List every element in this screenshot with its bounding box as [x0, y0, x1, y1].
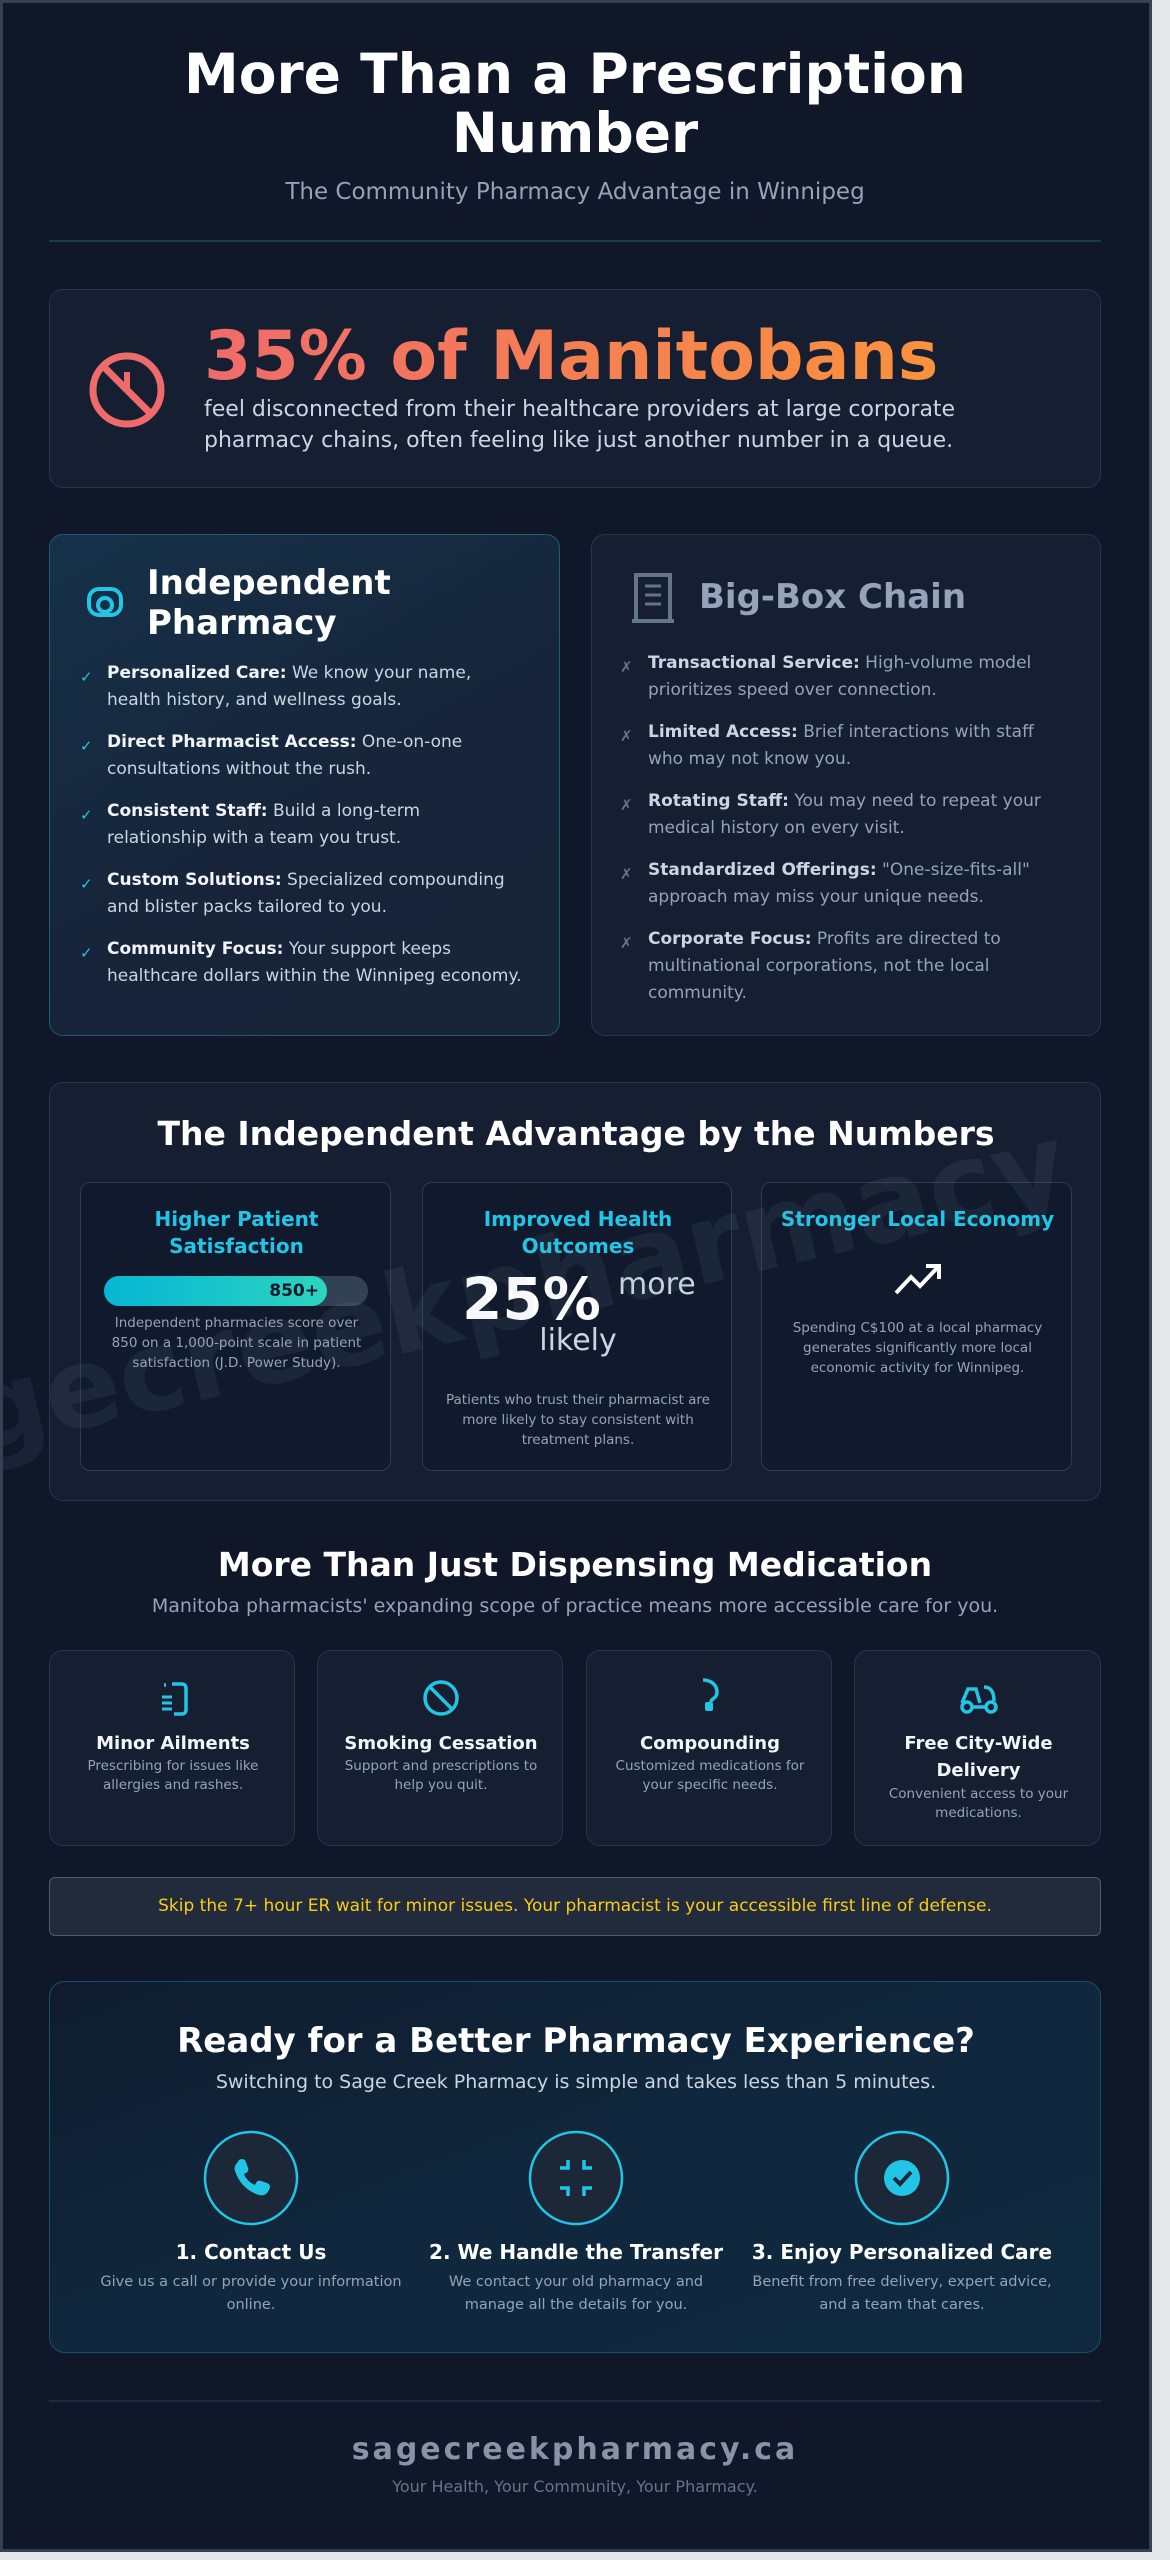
list: independent benefits: ✓: [80, 944, 93, 962]
list: big-box drawbacks: ✗: [620, 796, 633, 814]
heading: independent: Pharmacy: [147, 603, 337, 643]
stat card: health outcomes: more: [618, 1267, 696, 1302]
list: big-box drawbacks: ✗: [620, 658, 633, 676]
footer: tagline: Your Health, Your Community, Your Pharmacy.: [392, 2477, 758, 2496]
service card: compounding: Compounding: [640, 1733, 780, 1754]
list: independent benefits: Consistent Staff: Build a long-term relationship with a team you trust.: [107, 801, 420, 848]
list: independent benefits: ✓: [80, 875, 93, 893]
list: independent benefits: Personalized Care: We know your name, health history, and wellness goals.: [107, 663, 471, 710]
panel: independent pharmacy: [49, 534, 560, 1036]
service card: minor ailments: Minor Ailments: [96, 1733, 250, 1754]
icon: trending up: [894, 1264, 941, 1294]
service card: delivery: Convenient access to your medications.: [889, 1786, 1068, 1821]
heading: numbers: The Independent Advantage by the Numbers: [157, 1114, 995, 1153]
list: independent benefits: [80, 663, 522, 986]
list: independent benefits: ✓: [80, 806, 93, 824]
service card: smoking cessation: [317, 1650, 563, 1846]
callout: ER wait: Skip the 7+ hour ER wait for minor issues. Your pharmacist is your accessible first line of defense.: [158, 1896, 992, 1916]
stat card: health outcomes: Improved Health: [484, 1207, 672, 1231]
stat card: health outcomes: likely: [539, 1323, 617, 1358]
stat card: satisfaction: [80, 1182, 391, 1471]
list: independent benefits: Direct Pharmacist Access: One-on-one consultations without the rush.: [107, 732, 462, 779]
stat card: local economy: [761, 1182, 1072, 1471]
service card: minor ailments: Prescribing for issues like allergies and rashes.: [88, 1758, 258, 1793]
step: transfer: [429, 2130, 723, 2313]
list: big-box drawbacks: Transactional Service: High-volume model prioritizes speed over connection.: [648, 653, 1031, 700]
stat card: health outcomes: Patients who trust their pharmacist are more likely to stay consistent with treatment plans.: [446, 1392, 710, 1448]
stat card: satisfaction: Independent pharmacies score over 850 on a 1,000-point scale in patient satisfaction (J.D. Power Study).: [112, 1315, 361, 1371]
heading: CTA: Ready for a Better Pharmacy Experience?: [177, 2021, 975, 2061]
step: contact us: 1. Contact Us: [176, 2240, 326, 2264]
step: transfer: 2. We Handle the Transfer: [429, 2240, 723, 2264]
list: independent benefits: Community Focus: Your support keeps healthcare dollars within the Winnipeg economy.: [107, 939, 522, 986]
list: big-box drawbacks: [620, 653, 1041, 1003]
subtitle: services: Manitoba pharmacists' expanding scope of practice means more accessible care for you.: [152, 1595, 998, 1617]
stat headline: 35% of Manitobans: [204, 317, 938, 396]
panel: call to action: [49, 1981, 1101, 2353]
panel: numbers: [49, 1082, 1101, 1501]
list: big-box drawbacks: Rotating Staff: You may need to repeat your medical history on every visit.: [648, 791, 1041, 838]
subtitle: CTA: Switching to Sage Creek Pharmacy is simple and takes less than 5 minutes.: [216, 2071, 936, 2093]
stat callout panel: [49, 289, 1101, 488]
step: personalized care: [752, 2130, 1052, 2313]
stat card: satisfaction: Higher Patient: [155, 1207, 318, 1231]
step: contact us: [100, 2130, 402, 2313]
icon: independent: [87, 587, 123, 617]
service card: compounding: [586, 1650, 832, 1846]
service card: compounding: Customized medications for your specific needs.: [616, 1758, 804, 1793]
service card: delivery: Free City-Wide: [904, 1733, 1053, 1754]
list: big-box drawbacks: ✗: [620, 934, 633, 952]
heading: big-box: Big-Box Chain: [699, 577, 966, 617]
title: Number: [452, 101, 698, 165]
title: More Than a Prescription: [184, 42, 966, 106]
list: big-box drawbacks: Limited Access: Brief interactions with staff who may not know you.: [648, 722, 1034, 769]
footer: url: sagecreekpharmacy.ca: [352, 2432, 798, 2467]
panel: big-box chain: [591, 534, 1101, 1036]
stat card: satisfaction: Satisfaction: [169, 1234, 304, 1258]
icon: building: [632, 573, 674, 623]
heading: independent: [147, 563, 391, 643]
list: independent benefits: ✓: [80, 668, 93, 686]
list: big-box drawbacks: ✗: [620, 865, 633, 883]
title: [184, 42, 966, 165]
list: big-box drawbacks: ✗: [620, 727, 633, 745]
step: personalized care: 3. Enjoy Personalized Care: [752, 2240, 1052, 2264]
list: big-box drawbacks: Corporate Focus: Profits are directed to multinational corporations, not the local community.: [648, 929, 1001, 1003]
service card: delivery: Delivery: [936, 1760, 1021, 1781]
stat card: health outcomes: 25%: [462, 1265, 601, 1333]
stat card: health outcomes: Outcomes: [522, 1234, 634, 1258]
service card: smoking cessation: Smoking Cessation: [344, 1733, 538, 1754]
step: contact us: Give us a call or provide your information online.: [100, 2274, 402, 2313]
heading: independent: Independent: [147, 563, 391, 603]
subtitle: The Community Pharmacy Advantage in Winnipeg: [285, 179, 865, 205]
list: independent benefits: Custom Solutions: Specialized compounding and blister packs tailored to you.: [107, 870, 505, 917]
service card: delivery: [854, 1650, 1101, 1846]
stat text: feel disconnected from their healthcare providers at large corporate pharmacy chains, often feeling like just another number in a queue.: [204, 397, 955, 453]
icon: no sign: [90, 352, 164, 428]
service card: minor ailments: [49, 1650, 295, 1846]
stat card: local economy: Stronger Local Economy: [781, 1207, 1054, 1231]
stat card: health outcomes: [422, 1182, 732, 1471]
service card: smoking cessation: Support and prescriptions to help you quit.: [345, 1758, 537, 1793]
stat card: local economy: Spending C$100 at a local pharmacy generates significantly more local economic activity for Winnipeg.: [793, 1320, 1042, 1376]
step: transfer: We contact your old pharmacy and manage all the details for you.: [449, 2274, 703, 2313]
bar chart: 850+: [104, 1276, 368, 1306]
list: big-box drawbacks: Standardized Offerings: "One-size-fits-all" approach may miss your unique needs.: [648, 860, 1030, 907]
list: independent benefits: ✓: [80, 737, 93, 755]
callout: ER wait: [49, 1877, 1101, 1936]
bar chart: 850+: 850+: [269, 1281, 319, 1301]
step: personalized care: Benefit from free delivery, expert advice, and a team that cares.: [752, 2274, 1052, 2313]
heading: services: More Than Just Dispensing Medication: [218, 1545, 932, 1584]
